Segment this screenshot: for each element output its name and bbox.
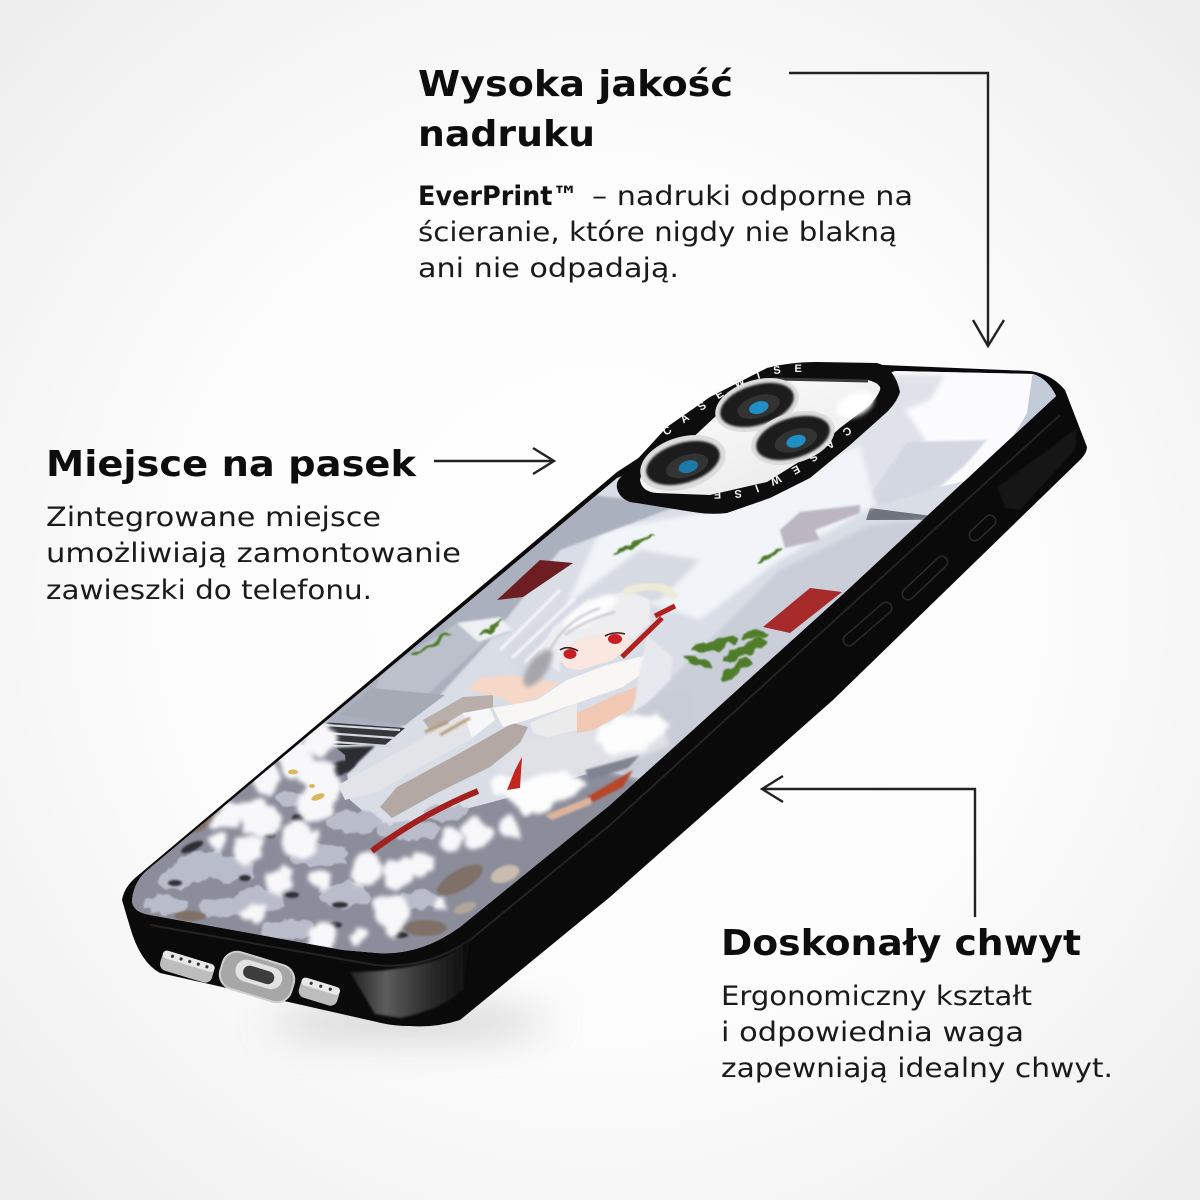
- bottom glossy corner: [350, 940, 470, 1018]
- green vines: [408, 531, 784, 686]
- red ribbons: [372, 791, 478, 851]
- text: print quality: ścieranie, które nigdy nie blakną: [418, 217, 897, 248]
- side button: small: [975, 521, 990, 535]
- white lilies: [487, 714, 667, 813]
- hair flowers: [625, 586, 676, 598]
- arrow: strap slot: [434, 448, 554, 474]
- case body: [122, 364, 1087, 1026]
- inner lip: [745, 379, 868, 387]
- text: print quality: EverPrint™: [418, 181, 578, 212]
- torso: [577, 686, 638, 733]
- heading: strap slot: Miejsce na pasek: [46, 444, 417, 485]
- phone case: [122, 362, 1087, 1026]
- flower field: [120, 721, 650, 965]
- lens right: [745, 402, 841, 474]
- heading: print quality: nadruku: [418, 114, 595, 155]
- lens top: [709, 369, 805, 441]
- left wall: [320, 495, 680, 745]
- hair: [537, 590, 650, 672]
- charging port: [216, 948, 298, 1006]
- arms: [468, 675, 560, 705]
- hair ribbon: [622, 606, 675, 657]
- face: [560, 630, 633, 670]
- side switch: [997, 428, 1077, 510]
- side button: action: [849, 608, 886, 640]
- infographic canvas: [47, 67, 1110, 1088]
- text: strap slot: [46, 502, 461, 606]
- text: print quality: – nadruki odporne na: [592, 181, 913, 212]
- text: strap slot: zawieszki do telefonu.: [46, 575, 372, 606]
- legs: [380, 723, 528, 818]
- phone shadow: [270, 1006, 550, 1038]
- lens left: [633, 425, 733, 501]
- heading: print quality: [418, 64, 733, 155]
- stockings: [338, 712, 472, 800]
- left speaker grille: [158, 950, 216, 984]
- sleeve: [493, 655, 650, 727]
- artwork: [120, 360, 1080, 980]
- column: [376, 624, 510, 694]
- heading: print quality: Wysoka jakość: [418, 64, 733, 105]
- text: print quality: [418, 181, 913, 284]
- flash highlight: [832, 387, 878, 423]
- side button: volume: [908, 562, 942, 594]
- orange flowers: [587, 770, 633, 802]
- skirt: [580, 733, 670, 776]
- anime figure: [338, 586, 700, 851]
- arrow: print quality: [789, 73, 1004, 346]
- red doors: [497, 560, 842, 633]
- text: strap slot: umożliwiają zamontowanie: [46, 538, 461, 569]
- arrow: grip: [762, 776, 975, 917]
- camera ring: [617, 362, 900, 514]
- side rim line: [150, 415, 1060, 966]
- heading: grip: Doskonały chwyt: [721, 923, 1081, 964]
- column capital: [780, 505, 860, 548]
- eyes: [564, 634, 622, 659]
- text: strap slot: Zintegrowane miejsce: [46, 502, 381, 533]
- floor behind figure: [610, 700, 698, 782]
- camera island: [616, 362, 900, 514]
- text: grip: i odpowiednia waga: [721, 1017, 1024, 1048]
- text: grip: Ergonomiczny kształt: [721, 981, 1032, 1012]
- right speaker grille: [297, 977, 341, 1007]
- steps: [300, 688, 445, 775]
- brand text bottom: CASEWISE: [714, 428, 851, 499]
- text: grip: [721, 981, 1113, 1084]
- text: print quality: ani nie odpadają.: [418, 253, 679, 284]
- dress: [530, 703, 577, 737]
- text: grip: zapewniają idealny chwyt.: [721, 1053, 1113, 1084]
- brand text top: CASEWISE: [663, 364, 802, 434]
- camera window: [640, 378, 880, 495]
